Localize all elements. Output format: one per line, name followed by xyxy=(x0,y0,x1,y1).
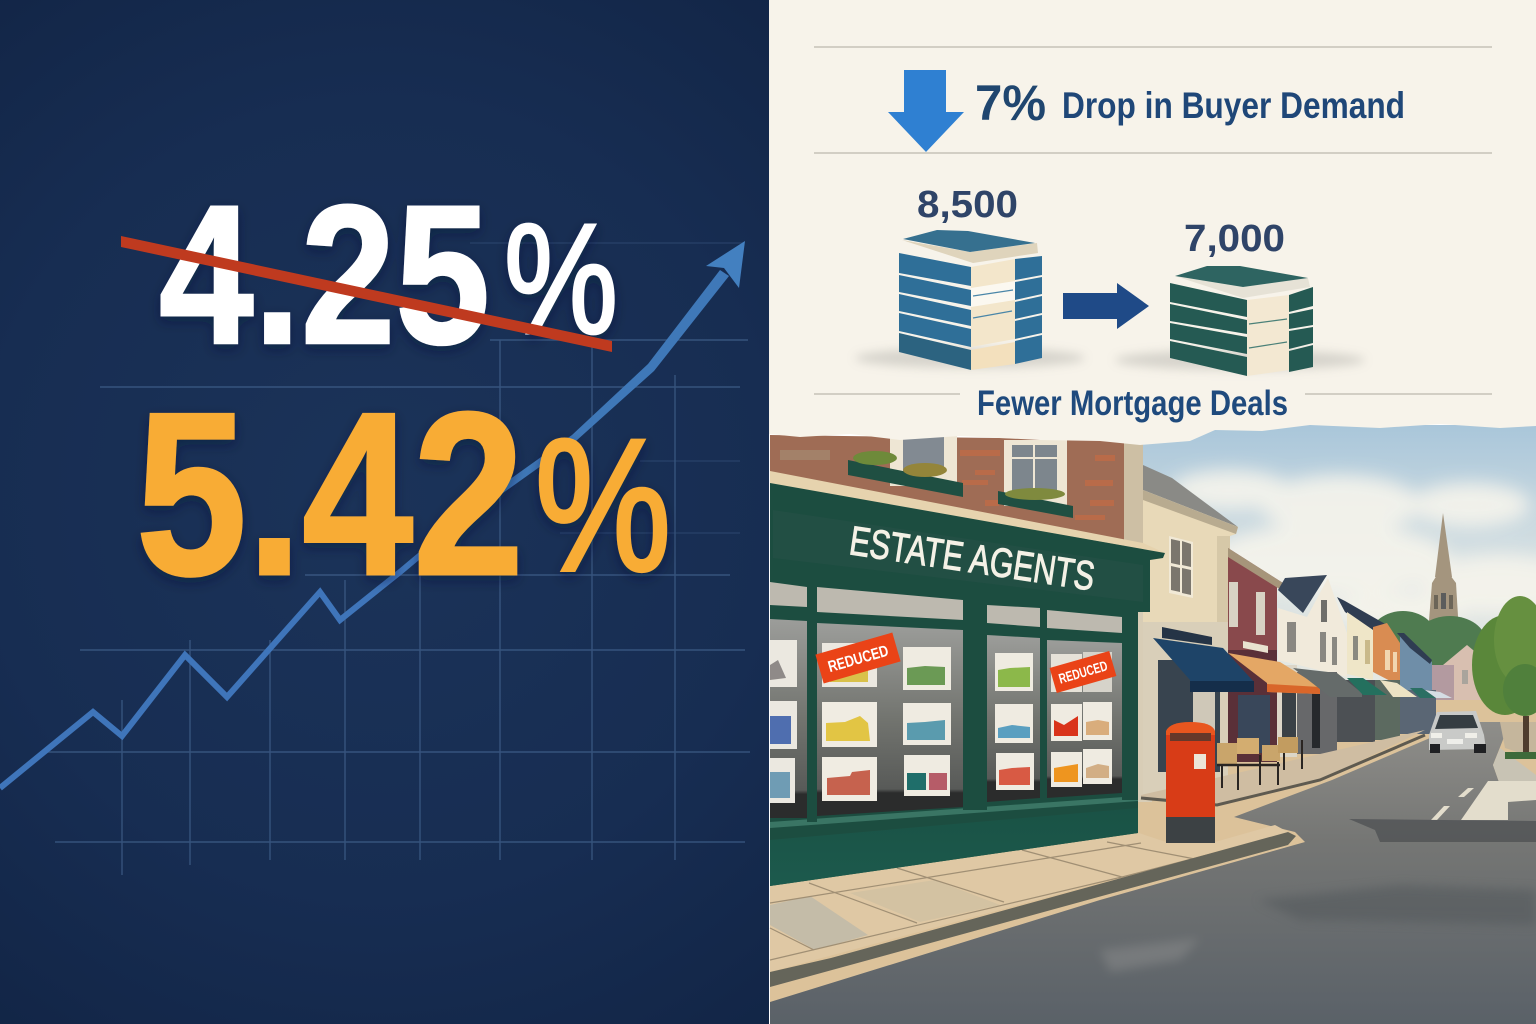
value: 8,500: 8,500 xyxy=(917,184,1018,226)
icon: tall document stack xyxy=(899,230,1042,370)
awnings xyxy=(1153,638,1452,698)
headline: drop in buyer demand: Drop in Buyer Demand xyxy=(1062,85,1405,126)
label: fewer mortgage deals: Fewer Mortgage Deals xyxy=(977,384,1288,423)
church xyxy=(1428,513,1459,633)
trees behind xyxy=(1371,611,1486,680)
pavement xyxy=(770,825,1296,987)
main road xyxy=(770,722,1536,1024)
icon: short document stack xyxy=(1170,266,1313,376)
arrow between stacks xyxy=(1063,283,1149,329)
back kerb xyxy=(1141,735,1425,805)
far pavement xyxy=(1493,722,1536,792)
road patches xyxy=(1100,885,1536,972)
shop fronts xyxy=(1143,622,1436,794)
sign panel xyxy=(773,510,1143,602)
panel: paper top xyxy=(769,0,1536,445)
shopfront mullions xyxy=(807,582,1138,822)
back pavement xyxy=(1141,730,1425,805)
sign text: estate agents: ESTATE AGENTS xyxy=(847,517,1098,599)
road shadow xyxy=(1349,819,1536,842)
rules xyxy=(814,47,1492,394)
chart: rising rate line with arrow xyxy=(0,241,745,788)
window A xyxy=(817,623,963,816)
reduced tag left: REDUCED xyxy=(826,643,891,676)
distant houses xyxy=(1432,645,1485,712)
sky xyxy=(1140,425,1536,725)
cafe tables and chairs xyxy=(1217,737,1302,790)
left window xyxy=(770,619,807,818)
shop building brick xyxy=(770,435,1143,552)
reduced tag left xyxy=(815,633,901,683)
shopfront xyxy=(770,483,1165,886)
value: 7,000: 7,000 xyxy=(1184,218,1285,260)
cream cornice xyxy=(770,471,1165,553)
roofs and upper walls xyxy=(1143,465,1432,696)
ground base xyxy=(770,700,1536,1024)
stone quoins xyxy=(1124,440,1143,552)
window boxes xyxy=(848,451,1073,518)
panel: street scene xyxy=(770,425,1536,1024)
new rate 5.42 percent: % xyxy=(535,400,671,610)
tree xyxy=(1472,596,1536,759)
upper windows xyxy=(890,436,1067,506)
lower plinth xyxy=(770,808,1138,886)
chart grid xyxy=(40,243,750,875)
red pillar box xyxy=(1166,722,1215,843)
reduced tag right: REDUCED xyxy=(1057,657,1109,687)
road markings xyxy=(1431,781,1536,820)
window C xyxy=(1047,640,1122,798)
old rate 4.25 percent: % xyxy=(504,192,618,367)
reduced tag right xyxy=(1050,651,1116,693)
old rate 4.25 percent: 4.25 xyxy=(159,164,490,385)
clouds xyxy=(1170,470,1536,628)
strikethrough xyxy=(121,236,612,352)
panel: rising rate on navy background xyxy=(0,0,769,1024)
ledge xyxy=(770,796,1138,828)
icon: down arrow xyxy=(888,70,964,152)
brick highlights xyxy=(780,450,1115,520)
shop signs xyxy=(1162,627,1268,653)
property posters xyxy=(770,640,1112,803)
transoms xyxy=(770,582,1122,633)
stack shadows xyxy=(855,348,1365,370)
car xyxy=(1429,711,1486,753)
headline: 7%: 7% xyxy=(975,75,1046,131)
window B xyxy=(987,635,1040,802)
new rate 5.42 percent: 5.42 xyxy=(136,365,524,624)
stone return wall xyxy=(1136,540,1152,802)
